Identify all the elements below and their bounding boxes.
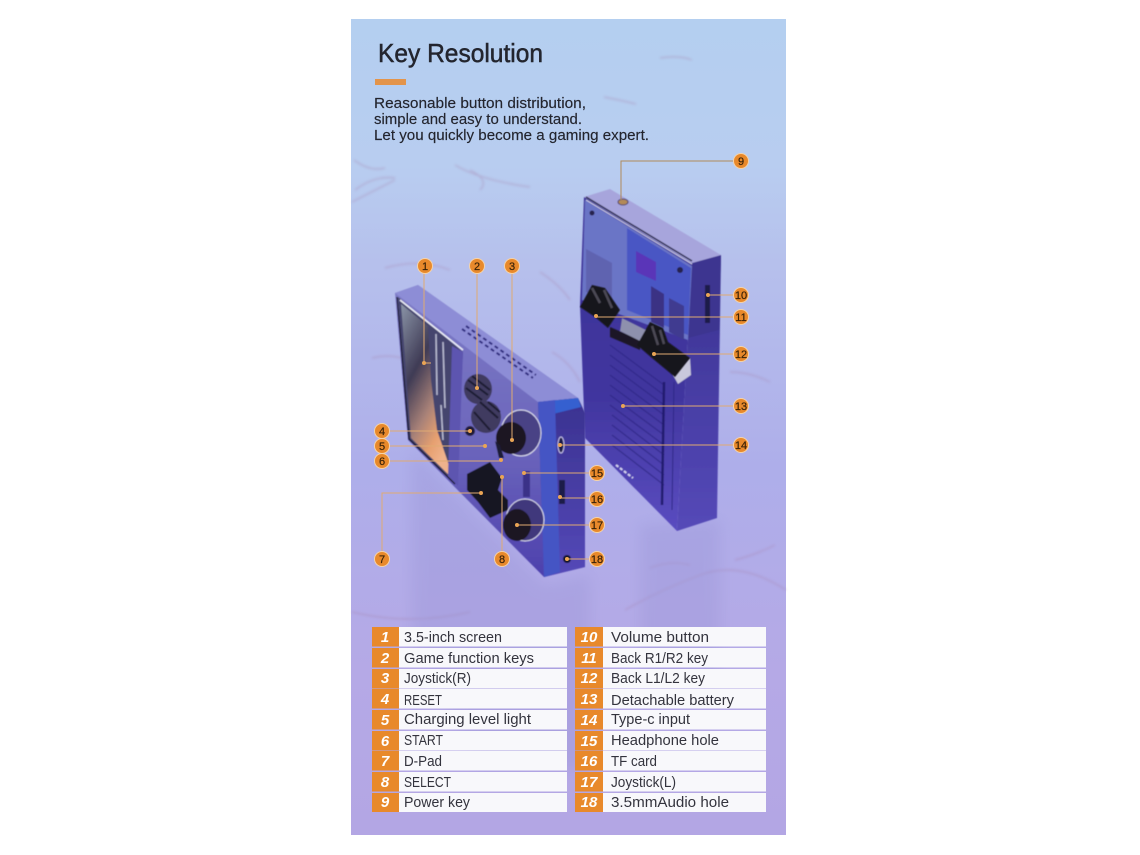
callout 17: [515, 518, 604, 532]
callout 1: 1: [422, 261, 428, 273]
callout 8: 8: [499, 554, 505, 566]
d-pad: [467, 462, 508, 518]
callout 4: 4: [379, 426, 385, 438]
callout 5: 5: [379, 441, 385, 453]
legend table: right column: Volume button: [611, 629, 709, 646]
legend table: right column: 17: [581, 774, 598, 791]
callout 17: 17: [591, 520, 603, 532]
legend table: right column: 14: [581, 712, 598, 729]
left joystick: [506, 499, 544, 541]
right joystick: [501, 410, 541, 456]
clip: [673, 358, 691, 384]
legend table: right column: 10: [581, 629, 598, 646]
callout 18: [565, 552, 604, 566]
legend table: right column: [575, 627, 766, 812]
legend table: left column: 6: [381, 733, 390, 750]
legend table: left column: Power key: [404, 794, 470, 811]
title accent bar: [375, 79, 406, 85]
legend table: right column: Type-c input: [611, 711, 691, 728]
legend table: right column: TF card: [611, 753, 657, 770]
callout 14: 14: [735, 440, 747, 452]
intro text: Reasonable button distribution,: [374, 95, 586, 112]
legend table: right column: 13: [581, 691, 598, 708]
legend table: left column: SELECT: [404, 774, 451, 791]
callout 16: [558, 492, 604, 506]
legend table: right column: Headphone hole: [611, 732, 719, 749]
callout 18: 18: [591, 554, 603, 566]
back triggers: [580, 285, 690, 377]
legend table: left column: 3.5-inch screen: [404, 629, 502, 646]
intro text: simple and easy to understand.: [374, 111, 582, 128]
callout 9: [621, 154, 748, 200]
device reflections: [412, 450, 720, 770]
intro text: Let you quickly become a gaming expert.: [374, 127, 649, 144]
device: front view: [395, 285, 585, 577]
legend table: left column: [372, 627, 567, 812]
callout 10: 10: [735, 290, 747, 302]
slots: [523, 471, 530, 497]
vents: [462, 326, 536, 378]
legend table: left column: RESET: [404, 692, 442, 709]
callout 11: [594, 310, 748, 324]
callout 7: 7: [379, 554, 385, 566]
start button: [495, 441, 504, 458]
legend table: right column: Detachable battery: [611, 692, 734, 709]
callout 6: 6: [379, 456, 385, 468]
legend table: right column: 18: [581, 794, 598, 811]
legend table: left column: D-Pad: [404, 753, 442, 770]
legend table: right column: 16: [581, 753, 598, 770]
audio jack: [563, 555, 571, 563]
legend table: right column: 15: [581, 733, 598, 750]
callout 12: [652, 346, 748, 362]
legend table: left column: Charging level light: [404, 711, 532, 728]
callout 14: [558, 438, 748, 452]
callout 2: 2: [474, 261, 480, 273]
legend table: left column: Joystick(R): [404, 670, 471, 687]
legend table: left column: START: [404, 732, 443, 749]
title: Key Resolution: [378, 38, 543, 68]
callout 1: [418, 258, 432, 365]
callouts: [374, 154, 748, 566]
callout 15: 15: [591, 468, 603, 480]
legend table: left column: 7: [381, 753, 390, 770]
legend table: left column: 5: [381, 712, 390, 729]
legend table: right column: 11: [581, 650, 597, 667]
callout 8: [494, 475, 510, 566]
callout 9: 9: [738, 156, 744, 168]
screen: [398, 297, 463, 483]
legend table: left column: 9: [381, 794, 390, 811]
function keys: [464, 374, 501, 433]
callout 13: 13: [735, 401, 747, 413]
battery ribs: [610, 345, 664, 485]
callout 4: [374, 424, 472, 438]
intro text: [374, 95, 649, 144]
volume slot: [705, 285, 710, 323]
callout 10: [706, 288, 748, 302]
callout 16: 16: [591, 494, 603, 506]
legend table: left column: 4: [380, 691, 390, 708]
legend table: left column: 2: [380, 650, 390, 667]
legend table: left column: 3: [381, 670, 390, 687]
reset button: [465, 426, 475, 436]
legend table: left column: Game function keys: [404, 650, 534, 667]
legend table: right column: Back L1/L2 key: [611, 670, 705, 687]
callout 3: [504, 258, 520, 442]
callout 11: 11: [735, 312, 747, 324]
legend table: right column: 3.5mmAudio hole: [611, 794, 729, 811]
callout 12: 12: [735, 349, 747, 361]
callout 5: [374, 438, 487, 454]
callout 15: [522, 466, 604, 480]
legend table: right column: Back R1/R2 key: [611, 650, 708, 667]
callout 2: [470, 258, 484, 390]
legend table: right column: Joystick(L): [611, 774, 676, 791]
power key: [618, 199, 628, 205]
background panel: [351, 19, 786, 835]
callout 7: [374, 491, 483, 566]
callout 13: [621, 398, 748, 414]
callout 3: 3: [509, 261, 515, 273]
callout 6: [374, 454, 503, 468]
legend table: left column: 8: [381, 774, 390, 791]
device: back view: [580, 189, 721, 531]
legend table: right column: 12: [581, 670, 598, 687]
legend table: left column: 1: [381, 629, 389, 646]
